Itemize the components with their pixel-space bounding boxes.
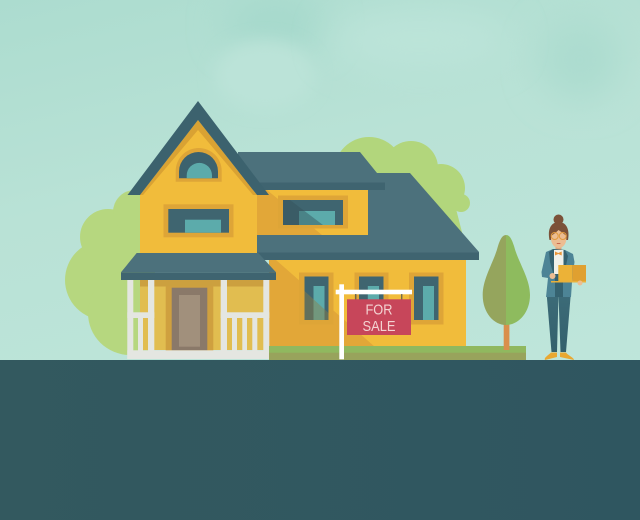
wall window right	[409, 272, 444, 324]
door	[172, 288, 207, 350]
arched gable window	[176, 148, 222, 182]
small tree	[483, 235, 530, 350]
legs	[547, 295, 571, 352]
porch back wall	[140, 280, 265, 350]
front gable wall	[140, 120, 257, 253]
door surround	[166, 286, 213, 350]
sign text second line: SALE	[362, 318, 396, 335]
gable trim	[140, 120, 257, 195]
porch shadow	[140, 280, 265, 286]
sign text: FOR	[366, 302, 393, 318]
lawn	[269, 346, 526, 360]
sign board	[347, 299, 411, 335]
hand left	[550, 273, 556, 279]
bow tie	[555, 252, 562, 256]
mouth	[557, 243, 560, 244]
porch railing and posts	[127, 280, 269, 359]
hair bun	[554, 214, 564, 224]
dormer window	[278, 196, 348, 228]
gable window	[164, 204, 234, 237]
hand right	[578, 280, 582, 286]
glasses	[551, 232, 566, 240]
tree: large bush behind house on the left	[65, 190, 172, 355]
lower roof eave	[257, 252, 479, 260]
dormer eave	[240, 182, 385, 190]
porch roof	[121, 253, 276, 280]
sign hangers	[355, 294, 402, 300]
wall window middle	[354, 272, 388, 324]
face	[551, 229, 566, 248]
jacket	[542, 249, 574, 297]
hair fringe	[551, 228, 566, 236]
porch	[121, 253, 276, 359]
neck	[556, 244, 562, 253]
upper back roof	[238, 152, 479, 260]
wall window left	[299, 272, 334, 324]
open box folder	[551, 265, 586, 282]
person: real estate agent	[542, 214, 586, 360]
ground	[0, 360, 640, 520]
tree: bush behind house on the right	[334, 137, 470, 240]
gable roof	[128, 101, 269, 195]
main wall	[269, 260, 466, 347]
shoes	[545, 352, 574, 360]
house	[121, 101, 479, 359]
for sale sign	[336, 284, 412, 359]
sign post	[336, 284, 412, 359]
hair	[549, 222, 568, 240]
dormer wall	[257, 190, 368, 235]
